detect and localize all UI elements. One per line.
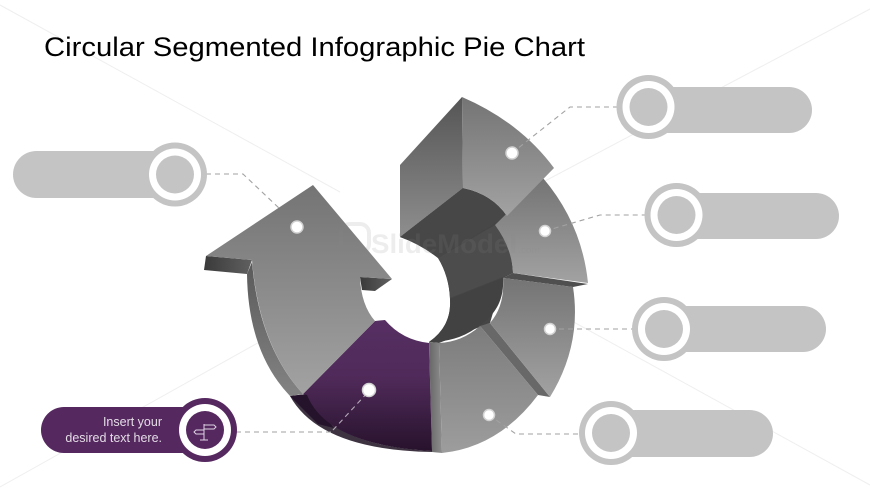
watermark bbox=[341, 224, 540, 259]
segment: bottom right bbox=[429, 326, 538, 453]
segment: right bbox=[480, 278, 575, 397]
segment: purple highlighted bbox=[290, 320, 432, 452]
callout: purple bbox=[41, 398, 237, 462]
watermark: .com bbox=[518, 245, 540, 255]
title: Circular Segmented Infographic Pie Chart bbox=[44, 32, 586, 62]
callout: right 2 bbox=[644, 183, 839, 247]
segment: inner walls bbox=[429, 225, 513, 342]
marker dots bbox=[291, 147, 556, 420]
callout: right 1 bbox=[616, 75, 812, 139]
connector lines bbox=[206, 107, 648, 434]
watermark: SlideModel bbox=[371, 229, 517, 259]
callout text: desired text here. bbox=[65, 431, 162, 445]
callout: left gray bbox=[13, 142, 207, 206]
callout: right 3 bbox=[632, 297, 826, 361]
segment: top block bbox=[400, 97, 507, 258]
segment: arrow bbox=[204, 185, 392, 396]
segment: top face bbox=[462, 97, 554, 216]
icon: signpost bbox=[194, 424, 216, 440]
callout: right 4 bbox=[579, 401, 773, 465]
chart: 3D circular segmented arrow bbox=[204, 97, 588, 453]
callout text: Insert your bbox=[103, 415, 162, 429]
segment: upper right bbox=[495, 178, 588, 287]
inner walls underlay bbox=[400, 188, 513, 343]
